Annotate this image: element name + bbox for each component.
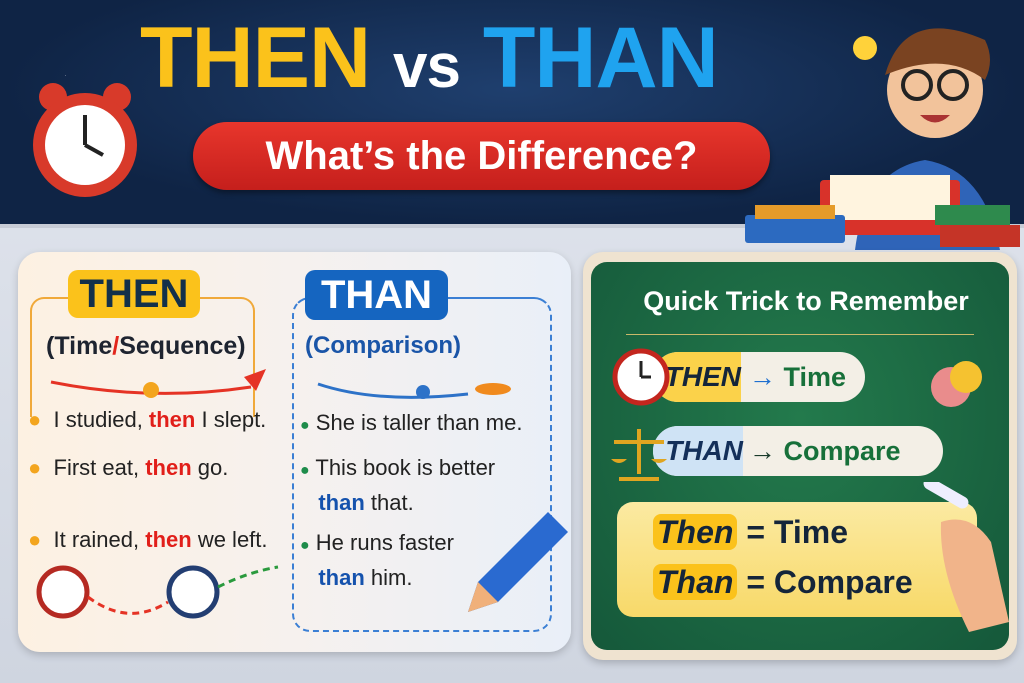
icon: hand with marker	[924, 482, 1009, 632]
subtitle time/sequence: (Time/Sequence)	[46, 332, 246, 360]
illustration: teacher with books	[745, 28, 1020, 250]
header band	[0, 0, 1024, 228]
THAN label: THAN	[321, 273, 432, 317]
icon: pencil	[468, 512, 568, 612]
row: then time: THEN	[665, 361, 741, 392]
THEN column: ● It rained, then we left.	[28, 527, 268, 552]
THAN column: ● She is taller than me.	[300, 410, 522, 435]
THAN column: ● This book is better	[300, 455, 495, 480]
row: than compare: THAN	[665, 435, 743, 466]
row: than compare: → Compare	[749, 436, 901, 466]
panel: quick trick chalkboard	[583, 252, 1017, 660]
THAN column: than that.	[318, 490, 414, 515]
icon: alarm clock	[33, 75, 137, 197]
subtitle comparison: (Comparison)	[305, 332, 461, 359]
subtitle pill: What’s the Difference?	[266, 134, 697, 178]
row: than compare	[653, 426, 943, 476]
icon: scales	[611, 429, 667, 481]
subtitle pill	[193, 122, 770, 190]
arrow: timeline	[50, 369, 266, 398]
summary box: Then = Time	[657, 514, 848, 550]
THAN column: than him.	[318, 565, 412, 590]
row: then time: → Time	[749, 362, 846, 392]
summary box	[617, 502, 977, 617]
THAN label	[305, 270, 448, 320]
THEN column: ● First eat, then go.	[28, 455, 228, 480]
THEN column	[28, 270, 278, 618]
heading: Quick Trick to Remember	[643, 286, 969, 316]
icon: clocks	[36, 566, 278, 618]
THEN label: THEN	[80, 272, 188, 316]
icon: clock	[612, 348, 670, 406]
arrow: comparison line	[318, 382, 511, 399]
THEN column: ● I studied, then I slept.	[28, 407, 266, 432]
examples	[28, 407, 268, 552]
THAN column: ● He runs faster	[300, 530, 454, 555]
row: then time	[653, 352, 865, 402]
title: THEN vs THAN	[140, 10, 718, 106]
examples	[300, 410, 522, 590]
summary box: Than = Compare	[657, 564, 913, 600]
icon: brain lightbulb	[931, 361, 982, 407]
panel: then vs than comparison card	[18, 252, 571, 652]
THAN column	[292, 270, 568, 632]
